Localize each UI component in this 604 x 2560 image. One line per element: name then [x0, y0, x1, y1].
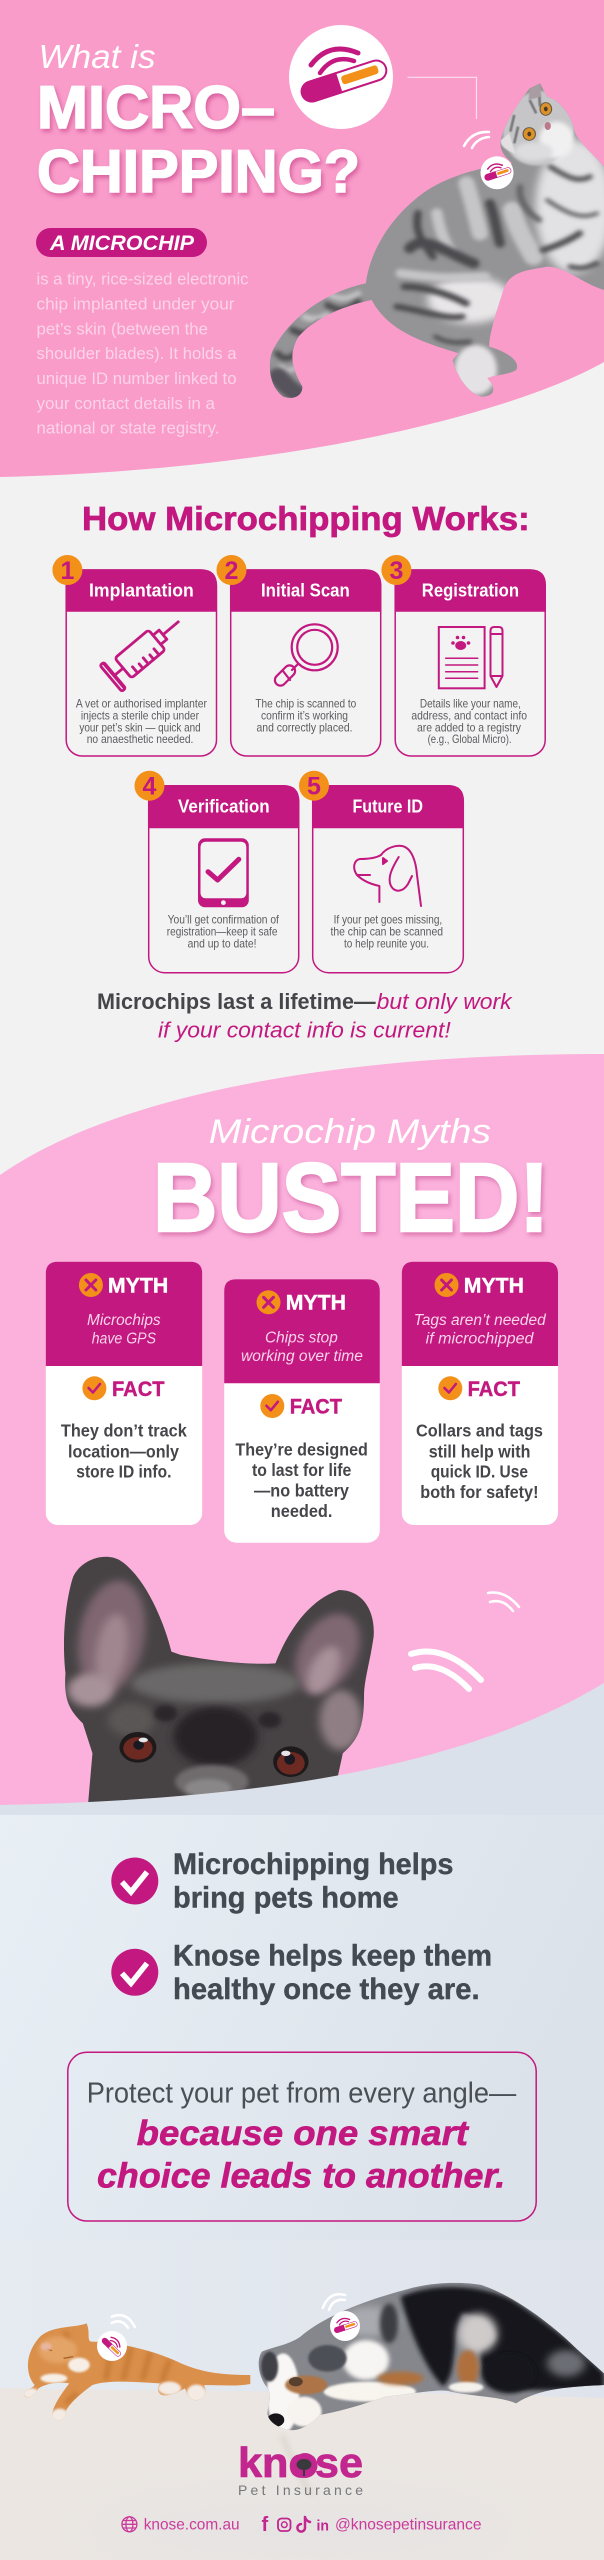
myth card 3: Tags aren’t needed	[414, 1312, 547, 1329]
panel: how microchipping works	[52, 500, 546, 1042]
card 1: implantation: 1	[60, 557, 74, 585]
text: microchip definition: your contact details in a	[36, 395, 216, 413]
heading: Microchip Myths Busted: BUSTED!	[153, 1143, 549, 1252]
panel: myths busted	[0, 1054, 604, 1820]
card 2: initial scan: and correctly placed.	[256, 720, 352, 734]
myth card 3: FACT	[468, 1378, 520, 1401]
heading: How Microchipping Works: How Microchipping Works:	[82, 500, 530, 537]
title: What is Microchipping: MICRO–	[37, 74, 275, 141]
label: A Microchip pill: A MICROCHIP	[49, 232, 195, 255]
card 1: implantation: no anaesthetic needed.	[87, 732, 193, 746]
dog eyes	[119, 1732, 309, 1777]
footer: social icons and handle: f	[262, 2514, 268, 2536]
myth card 1: They don’t track	[61, 1421, 187, 1441]
callout: protect your pet: choice leads to another.	[97, 2157, 505, 2196]
card 1: implantation: Implantation	[89, 580, 194, 601]
myth card 1	[46, 1262, 202, 1525]
myth card 2: —no battery	[254, 1480, 349, 1500]
callout: protect your pet: because one smart	[137, 2114, 469, 2153]
cat eyes and nose	[523, 103, 552, 140]
footer: social icons and handle: in	[316, 2518, 329, 2534]
card 4: verification: and up to date!	[188, 936, 256, 950]
myth card 3: still help with	[429, 1441, 530, 1461]
icon: small wifi arcs	[488, 1593, 519, 1611]
myth card 3: MYTH	[464, 1274, 524, 1297]
tagline: lifetime reminder: but only work	[377, 989, 513, 1014]
hero pink background	[0, 0, 604, 477]
bullet: Knose helps: healthy once they are.	[173, 1973, 480, 2006]
text: microchip definition: chip implanted under your	[36, 295, 235, 313]
icon: chip badge on cat	[464, 132, 514, 189]
footer: website: knose.com.au	[144, 2516, 240, 2533]
callout: protect your pet	[68, 2052, 536, 2221]
title: What is Microchipping: What is	[38, 38, 156, 75]
photo: french bulldog peeking	[64, 1556, 374, 1802]
text: microchip definition: pet’s skin (between the	[36, 320, 208, 338]
photo: ginger cat and merle dog	[15, 2280, 604, 2433]
card 3: registration: Details like your name,	[420, 696, 521, 710]
myth card 3: if microchipped	[426, 1330, 535, 1347]
title: What is Microchipping: CHIPPING?	[37, 138, 360, 205]
myth card 3: both for safety!	[420, 1482, 538, 1502]
icon: chip badge on ginger cat	[97, 2315, 135, 2361]
card 2: initial scan: The chip is scanned to	[255, 696, 357, 710]
wall background	[0, 2240, 604, 2400]
icon: phone with check	[198, 838, 249, 907]
title: What is Microchipping	[37, 38, 360, 205]
card 4: verification: Verification	[178, 796, 270, 817]
card 2: initial scan: 2	[225, 557, 238, 585]
heading: Microchip Myths Busted: Microchip Myths	[209, 1113, 491, 1151]
callout: protect your pet: Protect your pet from every angle—	[87, 2077, 516, 2109]
card 4: verification: registration—keep it safe	[167, 924, 278, 938]
panel: footer photo	[0, 2240, 604, 2560]
card 3: registration: are added to a registry	[417, 720, 521, 734]
myth card 2: MYTH	[286, 1292, 346, 1315]
card 5: future ID: Future ID	[352, 796, 423, 817]
myths pink background	[0, 1054, 604, 1820]
myth card 1: location—only	[68, 1441, 179, 1461]
card 4: verification: 4	[143, 773, 157, 801]
myth card 2: FACT	[290, 1395, 342, 1418]
text: microchip definition: national or state registry.	[36, 420, 220, 438]
blanket	[0, 2388, 604, 2560]
myth card 3: Collars and tags	[416, 1421, 543, 1441]
logo: knose pet insurance: knose	[238, 2439, 363, 2486]
card 2: initial scan	[216, 555, 381, 756]
bullet: microchipping helps: Microchipping helps	[173, 1848, 453, 1881]
logo: knose pet insurance: Pet Insurance	[238, 2482, 363, 2498]
myth card 1: store ID info.	[76, 1462, 171, 1482]
icon: dog head outline	[354, 846, 421, 906]
card 3: registration	[381, 555, 546, 756]
icon: document and pencil	[439, 627, 502, 688]
lower background fill	[0, 1815, 604, 2245]
bullet: Knose helps	[111, 1940, 492, 2006]
footer: social icons and handle	[262, 2514, 482, 2536]
myth card 1: FACT	[112, 1378, 165, 1401]
myth card 1: Microchips	[87, 1312, 161, 1329]
connector line	[408, 77, 476, 119]
footer: social icons and handle: @knosepetinsurance	[335, 2516, 482, 2533]
text: microchip definition: shoulder blades). It holds a	[36, 345, 237, 363]
card 2: initial scan: confirm it’s working	[261, 708, 348, 722]
myth card 2	[224, 1279, 380, 1543]
myth card 2: needed.	[271, 1501, 332, 1521]
card 3: registration: 3	[389, 557, 403, 585]
card 3: registration: address, and contact info	[411, 708, 527, 722]
myth card 2: They’re designed	[235, 1439, 368, 1459]
card 3: registration: Registration	[422, 580, 519, 601]
card 1: implantation	[52, 555, 217, 756]
bullet: microchipping helps: bring pets home	[173, 1881, 399, 1914]
myth card 3: quick ID. Use	[431, 1462, 528, 1482]
panel: closing message	[0, 1683, 604, 2560]
myth card 1: have GPS	[92, 1330, 157, 1347]
panel: hero	[0, 0, 604, 477]
card 3: registration: (e.g., Global Micro).	[428, 732, 512, 746]
card 5: future ID: to help reunite you.	[344, 936, 429, 950]
card 1: implantation: injects a sterile chip under	[81, 708, 199, 722]
myth card 3	[402, 1262, 558, 1525]
card 4: verification	[134, 771, 299, 973]
label: A Microchip pill	[36, 228, 207, 257]
icon: large microchip	[289, 25, 393, 129]
text: microchip definition: unique ID number linked to	[36, 370, 236, 388]
icon: syringe	[100, 609, 189, 691]
card 1: implantation: A vet or authorised implanter	[76, 696, 207, 710]
bullet: microchipping helps	[111, 1848, 453, 1914]
icon: chip badge on dog	[323, 2294, 360, 2341]
tagline: lifetime reminder	[97, 989, 513, 1042]
myth card 2: working over time	[241, 1348, 363, 1365]
card 5: future ID	[299, 771, 464, 973]
icon: large wifi arcs	[411, 1651, 481, 1689]
card 5: future ID: 5	[307, 773, 321, 801]
myth card 2: Chips stop	[265, 1330, 338, 1347]
card 5: future ID: the chip can be scanned	[330, 924, 443, 938]
card 4: verification: You’ll get confirmation of	[168, 912, 279, 926]
myth card 2: to last for life	[252, 1460, 352, 1480]
photo: grey tabby cat	[262, 77, 604, 407]
tagline: lifetime reminder: Microchips last a lifetime—	[97, 989, 376, 1014]
card 1: implantation: your pet’s skin — quick and	[79, 720, 201, 734]
card 2: initial scan: Initial Scan	[261, 580, 350, 601]
lower background curve	[0, 1683, 604, 2560]
bullet: Knose helps: Knose helps keep them	[173, 1940, 492, 1973]
card 5: future ID: If your pet goes missing,	[334, 912, 442, 926]
text: microchip definition	[36, 270, 248, 438]
myth card 1: MYTH	[108, 1274, 168, 1297]
tagline: lifetime reminder: if your contact info is current!	[158, 1017, 451, 1042]
text: microchip definition: is a tiny, rice-sized electronic	[36, 270, 248, 288]
icon: magnifying glass	[273, 624, 338, 688]
